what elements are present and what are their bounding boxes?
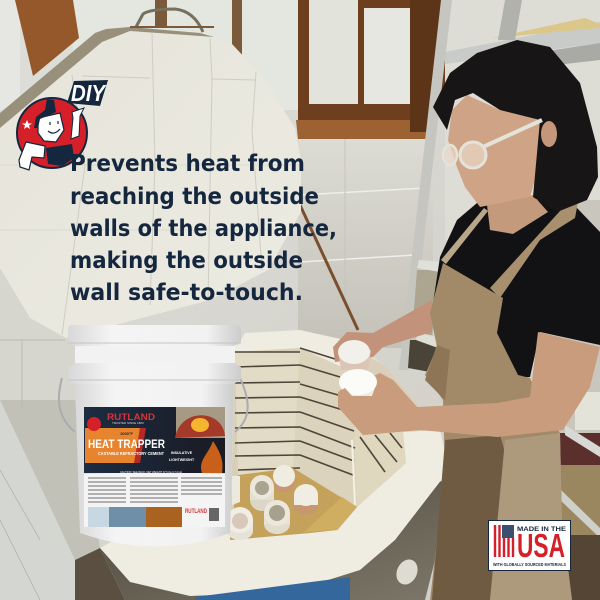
product pail <box>59 325 248 546</box>
apron straps <box>441 208 488 264</box>
pail label: CAUTION: SEE BACK. NET WEIGHT 37.5 lbs (17.0 kg) <box>120 471 182 474</box>
headline: making the outside <box>70 248 303 274</box>
Made in the USA badge <box>488 520 570 570</box>
headline: reaching the outside <box>70 184 319 210</box>
mascot face <box>38 113 64 142</box>
kiln brick walls <box>235 352 300 475</box>
pail label: RUTLAND <box>107 412 156 422</box>
kiln body <box>100 330 449 600</box>
far arm <box>333 300 432 362</box>
pail label: RUTLAND <box>185 509 208 515</box>
flag icon <box>495 525 514 557</box>
kiln pots <box>227 465 318 540</box>
mascot eyes and smile <box>48 121 60 133</box>
kiln rim <box>100 330 449 596</box>
neck <box>487 195 548 234</box>
headline: walls of the appliance, <box>70 216 337 242</box>
woman <box>333 40 600 600</box>
pail label <box>84 407 225 527</box>
DIY sign <box>67 80 108 106</box>
DIY mascot badge: DIY <box>71 80 107 106</box>
window <box>15 0 445 139</box>
mascot hair <box>34 99 56 128</box>
kiln floor <box>230 468 357 540</box>
lid handle <box>130 9 214 32</box>
near arm and hand <box>338 332 600 437</box>
Made in the USA badge: MADE IN THE <box>517 526 567 533</box>
headline <box>70 151 337 306</box>
DIY mascot badge <box>17 80 108 170</box>
pail label: 1000°F <box>120 431 133 436</box>
mascot overalls <box>46 144 74 166</box>
kiln lid <box>0 27 301 338</box>
Made in the USA badge: USA <box>517 527 565 564</box>
pail label: HEAT TRAPPER <box>88 437 165 451</box>
poker rod <box>300 205 358 330</box>
pail label: LIGHTWEIGHT <box>169 458 195 462</box>
Made in the USA badge: WITH GLOBALLY SOURCED MATERIALS <box>493 562 567 568</box>
headline: Prevents heat from <box>70 151 305 177</box>
apron <box>425 263 572 600</box>
pail label: CASTABLE REFRACTORY CEMENT <box>98 451 164 456</box>
mascot sleeve and hand <box>19 142 45 170</box>
pail label: TRUSTED SINCE 1883 <box>112 421 144 425</box>
pail label: INSULATIVE <box>171 451 193 455</box>
mascot raised arm <box>71 108 84 139</box>
head: face <box>448 95 558 207</box>
metal shelving <box>399 0 600 600</box>
mascot stars <box>22 120 32 129</box>
black shirt <box>432 200 600 378</box>
glasses <box>483 120 542 147</box>
ear <box>541 121 557 147</box>
headline: wall safe-to-touch. <box>70 280 303 306</box>
white cups <box>338 340 420 435</box>
hair <box>433 40 598 212</box>
